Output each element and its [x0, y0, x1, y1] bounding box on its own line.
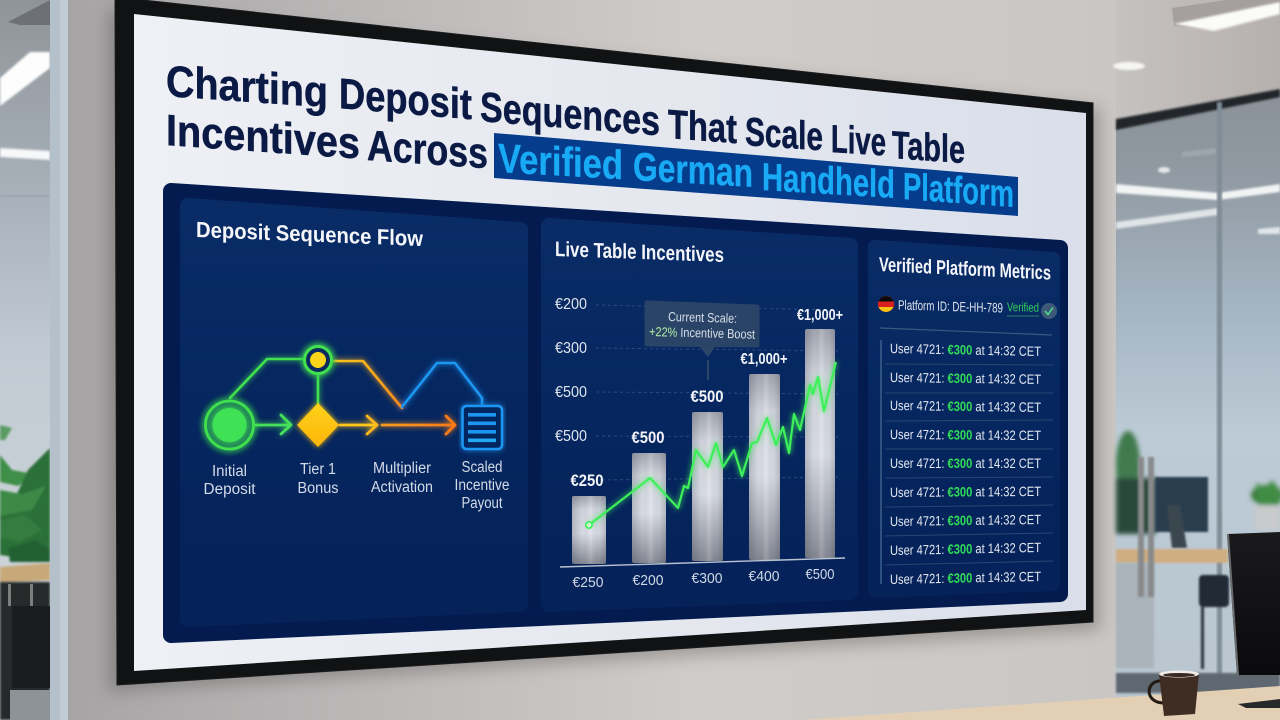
panel: live table incentives [549, 226, 850, 604]
title: That [668, 101, 737, 152]
icon: german flag [878, 296, 894, 312]
display screen [134, 14, 1086, 671]
title: Charting [166, 57, 328, 117]
dashboard backdrop [171, 191, 1060, 635]
platform id: Platform ID: DE-HH-789 [898, 297, 1003, 316]
bar value labels: €1,000+ [740, 351, 788, 368]
transaction list: User 4721: €300 at 14:32 CET [890, 512, 1041, 529]
transaction list: User 4721: €300 at 14:32 CET [890, 370, 1041, 387]
foreground desk [800, 686, 1280, 720]
door frame column [50, 0, 68, 720]
y axis labels and grid: €300 [555, 340, 587, 357]
flow step labels: Activation [371, 479, 433, 496]
transaction list: User 4721: €300 at 14:32 CET [890, 540, 1041, 558]
flow step labels: Bonus [298, 480, 339, 497]
title highlight: Verified German Handheld Platform: Verified [498, 135, 623, 188]
title: Scale [745, 110, 823, 159]
bar value labels: €250 [570, 472, 604, 490]
icon: tier node [304, 346, 332, 374]
title highlight: Verified German Handheld Platform: German [633, 145, 753, 196]
y axis labels and grid: €200 [555, 296, 587, 313]
title [166, 57, 965, 178]
wall shadow behind display [108, 8, 1100, 692]
title: Table [892, 124, 965, 172]
panel: verified platform metrics [875, 247, 1057, 591]
callout: current scale: Current Scale: [668, 309, 737, 326]
bar value labels: €500 [690, 388, 724, 406]
x axis labels: €400 [748, 568, 780, 585]
x axis labels: €300 [692, 570, 722, 587]
flow step labels: Incentive [454, 477, 510, 494]
bar chart [560, 329, 845, 567]
flow step labels: Initial [212, 463, 247, 480]
flow step labels: Multiplier [373, 460, 431, 477]
flow step labels: Payout [462, 495, 503, 512]
flow step labels [204, 459, 510, 512]
coffee mug [1149, 670, 1199, 716]
heading: verified platform metrics: Verified Platform Metrics [879, 254, 1051, 285]
heading: deposit sequence flow: Deposit Sequence Flow [196, 217, 424, 251]
left glass room [0, 0, 50, 720]
bar value labels: €500 [632, 429, 664, 447]
callout: current scale: +22% Incentive Boost [649, 324, 756, 342]
transaction list [881, 340, 1053, 587]
y axis labels and grid: €500 [555, 428, 587, 445]
right glass room [1113, 0, 1280, 720]
title highlight: Verified German Handheld Platform: Platform [903, 166, 1014, 216]
title: Live [831, 118, 886, 165]
icon: initial deposit node [206, 401, 254, 449]
transaction list: User 4721: €300 at 14:32 CET [890, 569, 1041, 587]
icon: tier 1 diamond [297, 403, 339, 447]
flow diagram connectors [230, 359, 482, 434]
transaction list: User 4721: €300 at 14:32 CET [890, 427, 1041, 443]
title: Across [367, 122, 488, 178]
title highlight: Verified German Handheld Platform: Handheld [762, 156, 895, 207]
x axis labels: €250 [572, 574, 604, 591]
verified badge: Verified [1007, 300, 1039, 315]
transaction list: User 4721: €300 at 14:32 CET [890, 398, 1041, 415]
transaction list: User 4721: €300 at 14:32 CET [890, 456, 1041, 471]
title: Deposit [339, 70, 472, 129]
transaction list: User 4721: €300 at 14:32 CET [890, 484, 1041, 500]
title: Sequences [480, 83, 660, 144]
display bezel [115, 0, 1093, 685]
x axis labels: €200 [632, 572, 664, 589]
flow step labels: Tier 1 [300, 461, 336, 478]
flow step labels: Scaled [462, 459, 502, 476]
verified badge [1007, 300, 1057, 319]
green trend line [586, 362, 836, 528]
title highlight: Verified German Handheld Platform [494, 133, 1018, 216]
foreground monitor [1227, 532, 1280, 708]
y axis labels and grid [555, 296, 838, 480]
title: Incentives [166, 106, 360, 169]
icon: payout document [462, 406, 502, 449]
heading: live table incentives: Live Table Incentives [555, 238, 724, 267]
transaction list: User 4721: €300 at 14:32 CET [890, 341, 1041, 359]
callout: current scale [647, 303, 757, 380]
x axis labels [572, 566, 834, 591]
flow step labels: Deposit [204, 481, 256, 498]
bar value labels: €1,000+ [797, 307, 843, 324]
y axis labels and grid: €500 [555, 384, 587, 401]
panel: deposit sequence flow [188, 206, 520, 619]
x axis labels: €500 [806, 566, 834, 583]
bar value labels [570, 307, 843, 490]
